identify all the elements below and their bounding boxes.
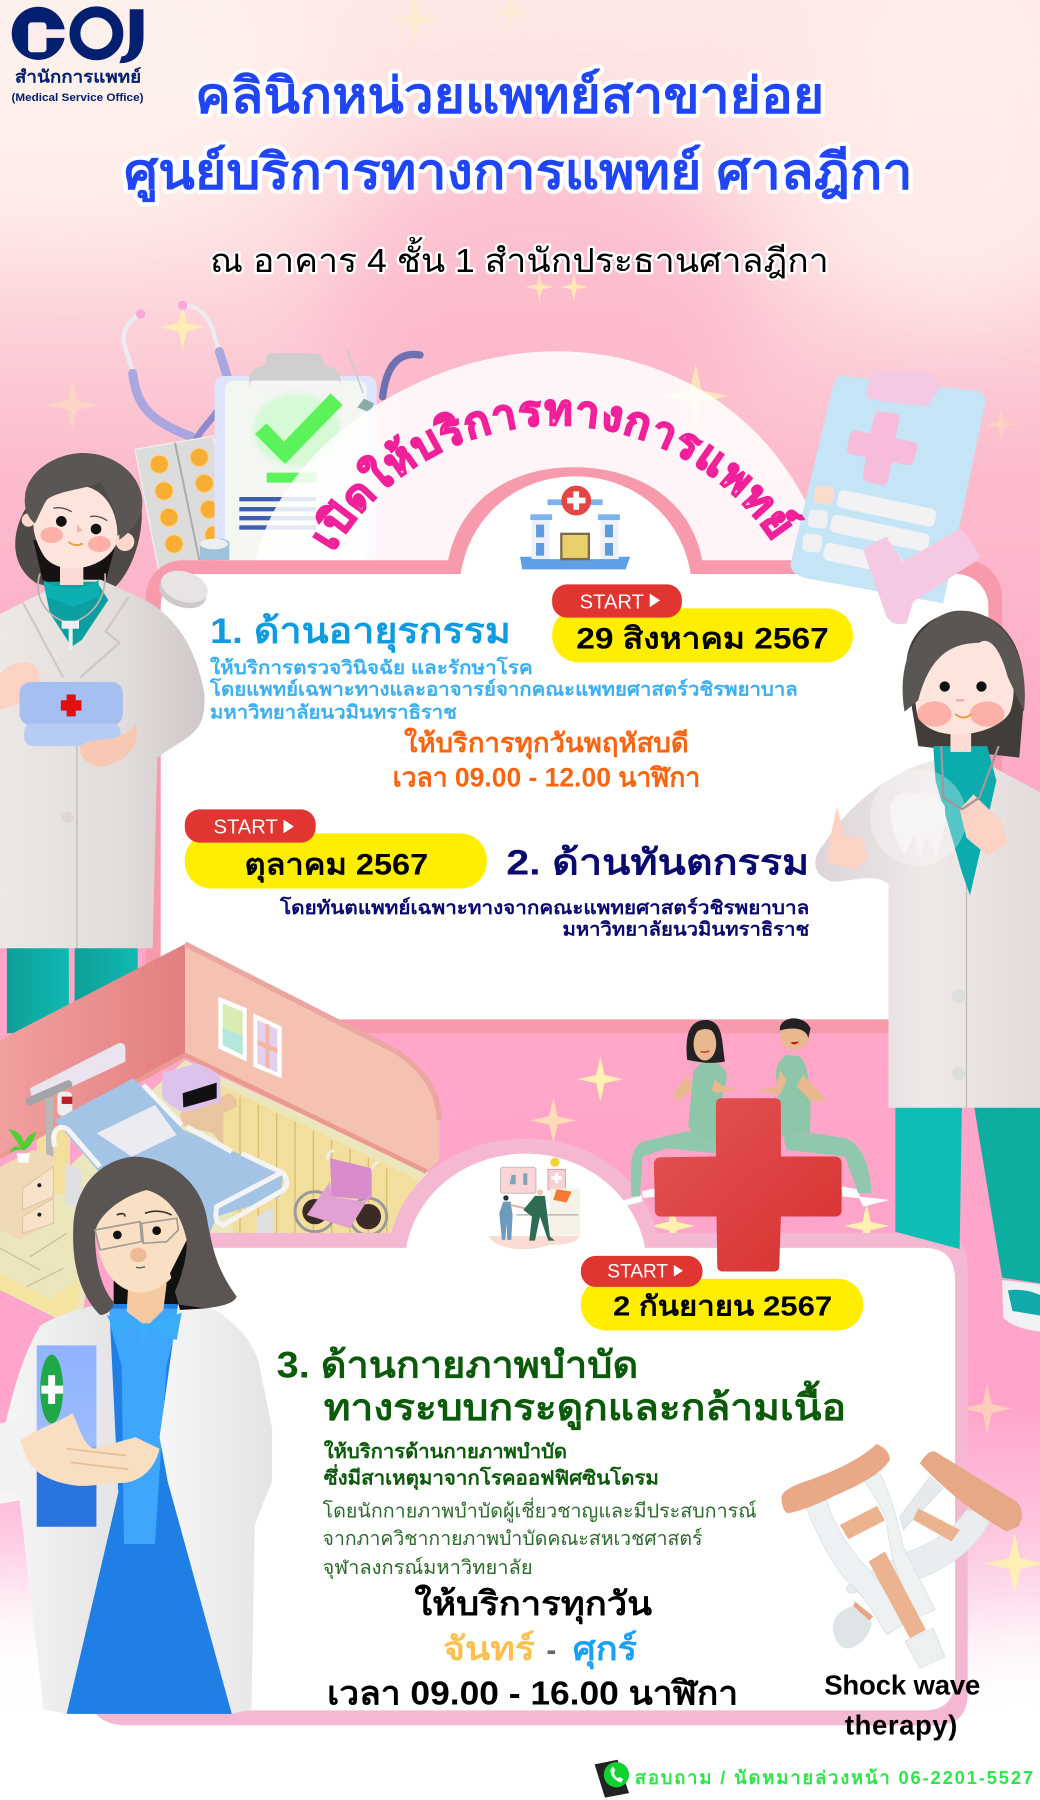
icon: clipboard with check [200,349,377,563]
shoe [1002,1280,1040,1332]
section 2 description: มหาวิทยาลัยนวมินทราธิราช [562,920,809,941]
section 1 schedule: ให้บริการทุกวันพฤหัสบดี [404,727,689,760]
logo mark: O and J [75,9,143,63]
date badge 2: START [214,816,278,838]
icon: crutches [782,1444,1022,1668]
left nurse [620,1020,737,1207]
section 3 description [323,1498,756,1580]
section 1 description: โดยแพทย์เฉพาะทางและอาจารย์จากคณะแพทยศาสตร์วชิรพยาบาล [209,678,798,701]
section 1 schedule [393,727,700,792]
date badge 1: 29 สิงหาคม 2567 [576,623,829,656]
icon: pill blister [135,436,233,568]
section 2 description: โดยทันตแพทย์เฉพาะทางจากคณะแพทยศาสตร์วชิรพยาบาล [279,896,809,919]
section 3 description: จุฬาลงกรณ์มหาวิทยาลัย [323,1556,533,1580]
pictures [218,997,247,1062]
subtitle: ณ อาคาร 4 ชั้น 1 สำนักประธานศาลฎีกา [210,236,829,280]
neck and scrub [933,746,996,895]
bed [65,1163,273,1233]
illustration: hospital room [0,944,439,1323]
date badge 2 [185,809,487,889]
section 1 schedule: เวลา 09.00 - 12.00 นาฬิกา [393,762,700,792]
icon: pill disc [155,565,212,614]
coat body [815,758,1040,1108]
section 3 subheading [324,1440,659,1490]
section 3 subheading: ซึ่งมีสาเหตุมาจากโรคออฟฟิศซินโดรม [324,1463,659,1490]
panel: section 3 [69,1139,968,1725]
section 3 schedule: จันทร์ [443,1630,535,1668]
panel: section 1 and 2 [146,467,1002,1033]
section 1 description: มหาวิทยาลัยนวมินทราธิราช [210,703,457,724]
logo text: สำนักการแพทย์ [15,67,141,87]
date badge 1: START [580,591,644,613]
wheelchair [295,1150,387,1235]
section 3 schedule: - [546,1634,556,1667]
hair back [15,473,142,597]
icon: phone contact [595,1760,629,1798]
right nurse [757,1018,890,1207]
title: ศูนย์บริการทางการแพทย์ ศาลฎีกา [124,144,913,202]
stethoscope [941,746,999,809]
section 2 description [279,896,809,941]
curved heading: เปิดให้บริการทางการแพทย์ [312,399,806,550]
coat [0,580,205,948]
section 1 description: ให้บริการตรวจวินิจฉัย และรักษาโรค [210,656,533,679]
right hand [960,794,1008,855]
icon: physiotherapy scene [488,1158,580,1249]
date badge 3: START [607,1262,669,1283]
head [73,1157,237,1347]
icon: hospital [520,486,630,569]
section 1 description [209,656,798,724]
section 3 subheading: ให้บริการด้านกายภาพบำบัด [324,1440,567,1463]
coat [0,1302,118,1714]
illustration: bottom doctor [0,1157,272,1714]
trousers [7,936,138,1033]
section 2 heading: 2. ด้านทันตกรรม [506,843,809,883]
face [915,622,1014,735]
wall panel and IV stand [30,1043,125,1100]
illustration: right doctor [815,611,1040,1332]
sleeves and hands [0,1418,23,1492]
nightstand and plant [0,1150,53,1240]
section 1 heading: 1. ด้านอายุรกรรม [210,611,511,653]
section 3 heading [277,1345,846,1431]
section 3 schedule: ศุกร์ [573,1630,637,1670]
section 3 schedule [327,1584,738,1713]
red cross [654,1098,842,1272]
illustration: nurses on red cross [620,1018,890,1272]
title: คลินิกหน่วยแพทย์สาขาย่อย [195,69,824,124]
trousers [895,1102,962,1249]
head [22,453,142,650]
date badge 3: 2 กันยายน 2567 [613,1291,832,1322]
back walls [0,944,185,1157]
title [124,69,913,202]
logo subtitle: (Medical Service Office) [11,92,144,104]
tooth [870,769,967,866]
shock wave label [824,1669,980,1741]
illustration: left doctor [0,453,205,1033]
section 3 description: โดยนักกายภาพบำบัดผู้เชี่ยวชาญและมีประสบการณ์ [323,1498,756,1524]
contact text: สอบถาม / นัดหมายล่วงหน้า 06-2201-5527 [635,1767,1033,1788]
blue clipboard [37,1345,96,1527]
wainscot [217,1083,418,1233]
icon: clipboard with cross [790,370,985,624]
microwave and table [180,1093,237,1147]
medical box and hand [0,662,137,767]
shock wave label: therapy) [845,1710,957,1741]
date badge 2: ตุลาคม 2567 [245,849,428,883]
logo mark: C [12,7,67,60]
section 3 schedule: ให้บริการทุกวัน [414,1584,652,1625]
thumbs-up hand [828,807,868,869]
hair back [114,1274,207,1311]
section 3 description: จากภาควิชากายภาพบำบัดคณะสหเวชศาสตร์ [323,1527,703,1550]
dress [67,1304,232,1714]
floor [0,1060,430,1323]
arch dome [255,351,829,563]
section 3 heading: ทางระบบกระดูกและกล้ามเนื้อ [324,1380,846,1431]
section 3 heading: 3. ด้านกายภาพบำบัด [277,1345,638,1386]
logo [11,7,144,104]
shock wave label: Shock wave [824,1669,980,1700]
hair back [906,612,1024,758]
date badge 3 [581,1256,863,1330]
section 3 schedule: เวลา 09.00 - 16.00 นาฬิกา [327,1676,738,1713]
date badge 1 [552,584,853,662]
icon: stethoscope [124,301,420,438]
